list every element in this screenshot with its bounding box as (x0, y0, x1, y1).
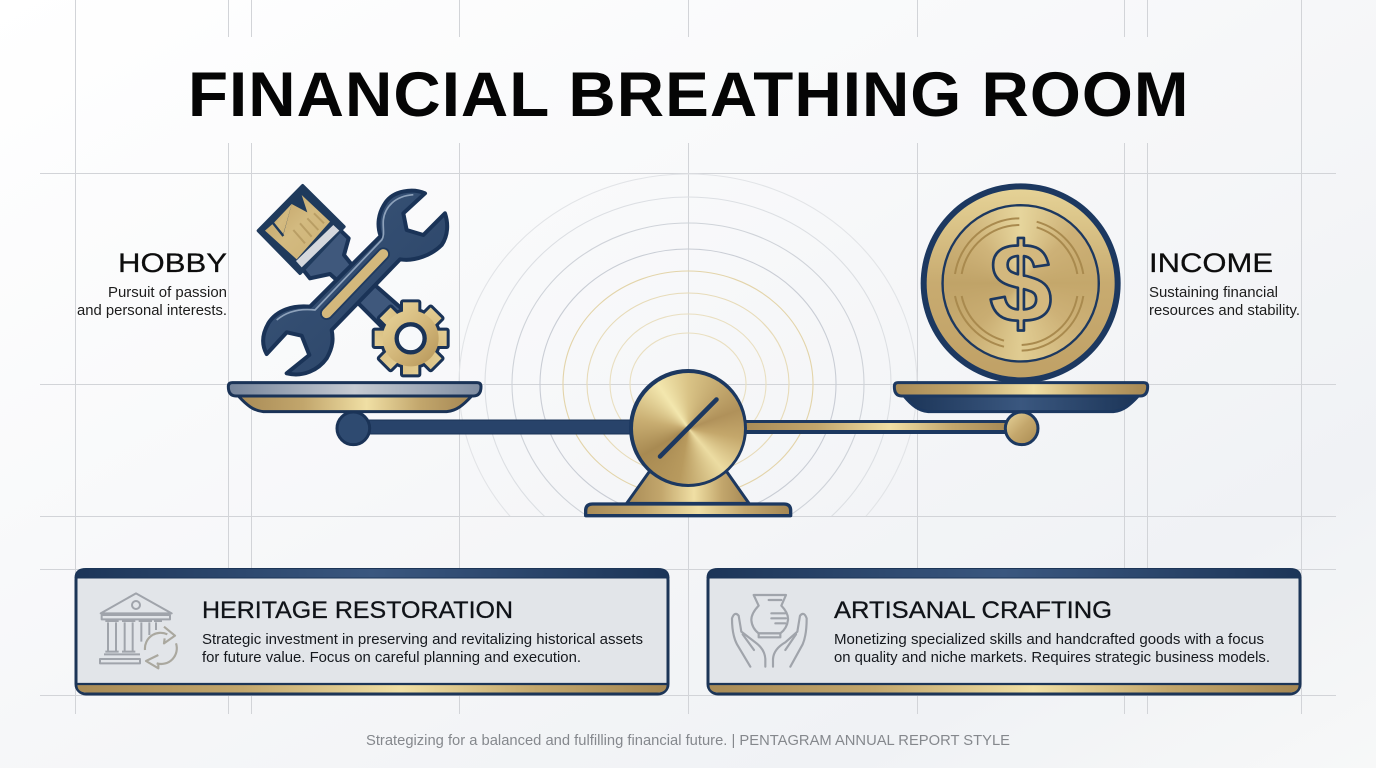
title: FINANCIAL BREATHING ROOM (188, 59, 1188, 130)
scale beam: gold right arm (742, 420, 1012, 434)
dollar sign: $ (989, 220, 1052, 347)
hobby label (77, 248, 227, 319)
scale beam: navy left arm (353, 420, 643, 434)
card body text: Strategic investment in preserving and revitalizing historical assets (202, 631, 643, 648)
card body text: for future value. Focus on careful planning and execution. (202, 649, 581, 666)
hobby label: HOBBY (118, 248, 227, 278)
icon: crossed brush, wrench and gear (258, 186, 447, 374)
card heading: ARTISANAL CRAFTING (834, 597, 1112, 624)
card body text: Monetizing specialized skills and handcrafted goods with a focus (834, 631, 1264, 648)
right beam ball (1005, 412, 1038, 445)
hobby label: and personal interests. (77, 303, 227, 319)
hobby label: Pursuit of passion (108, 285, 227, 301)
income label: INCOME (1149, 248, 1273, 278)
panel: heritage restoration (75, 568, 669, 694)
income label: Sustaining financial (1149, 285, 1278, 301)
concentric breathing-room arcs (458, 174, 918, 516)
card body text: on quality and niche markets. Requires strategic business models. (834, 649, 1270, 666)
icon: paint brush (258, 186, 403, 330)
income label: resources and stability. (1149, 303, 1300, 319)
left beam ball (337, 412, 370, 445)
icon: wrench (263, 191, 447, 374)
footer: Strategizing for a balanced and fulfilling financial future. | PENTAGRAM ANNUAL REPORT STYLE (366, 733, 1010, 749)
card body text (834, 631, 1270, 666)
card body text (202, 631, 643, 666)
icon: hands holding vase (732, 595, 807, 667)
icon: gear (375, 302, 447, 374)
icon: temple with renewal arrows (100, 593, 177, 668)
scale pivot disc (629, 369, 747, 487)
income label (1149, 248, 1300, 319)
right pan: income (894, 383, 1148, 445)
panel: artisanal crafting (707, 568, 1301, 694)
scale fulcrum base (586, 472, 791, 516)
card heading: HERITAGE RESTORATION (202, 597, 513, 624)
left pan: hobby (228, 383, 481, 445)
icon: gold dollar coin (921, 183, 1121, 383)
